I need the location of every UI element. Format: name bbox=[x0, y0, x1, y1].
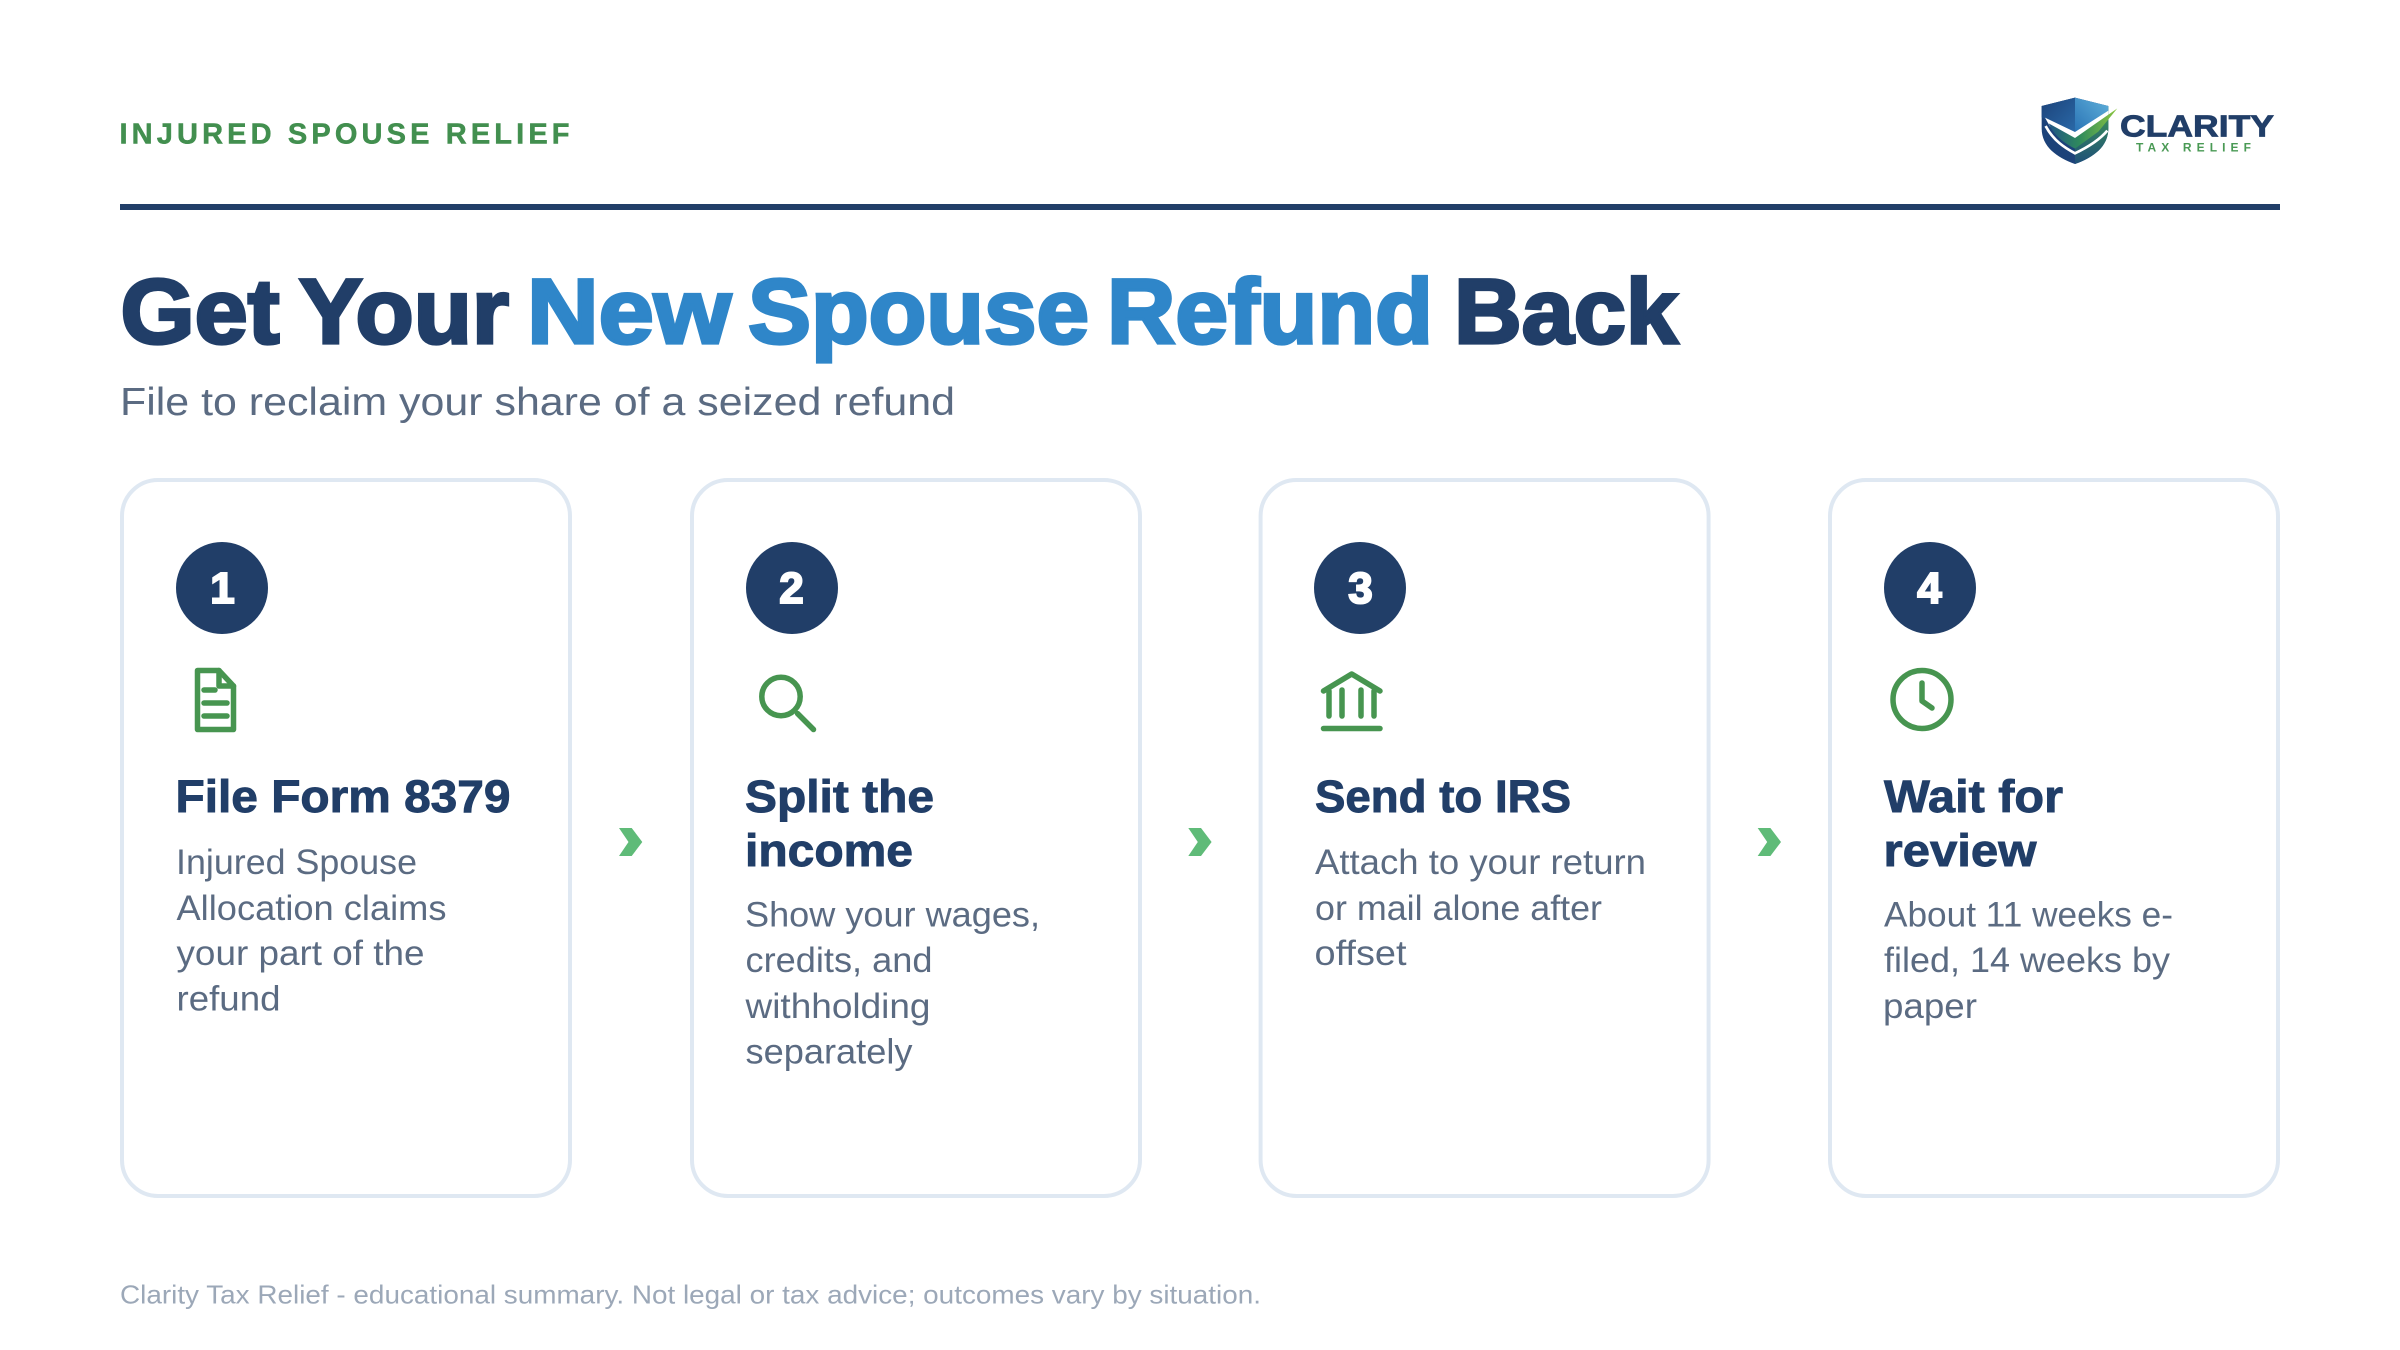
step 4 heading bbox=[1884, 771, 2063, 876]
step 2 heading: Split the bbox=[745, 771, 934, 822]
step 3 description bbox=[1314, 843, 1646, 973]
step 2 description: Show your wages, bbox=[745, 896, 1040, 934]
logo tagline: TAX RELIEF bbox=[2136, 140, 2251, 154]
title: Spouse bbox=[748, 261, 1089, 363]
panel: step 2 bbox=[692, 480, 1140, 1196]
logo wordmark: CLARITY bbox=[2120, 108, 2274, 144]
step 4 heading: Wait for bbox=[1884, 771, 2063, 822]
icon: clock bbox=[1893, 670, 1951, 728]
arrow 1 bbox=[619, 828, 642, 856]
step 2 heading: income bbox=[745, 825, 913, 876]
step 1 description: your part of the bbox=[176, 934, 424, 973]
arrow 3 bbox=[1758, 828, 1781, 856]
title: Your bbox=[299, 261, 509, 363]
step 3 description: Attach to your return bbox=[1315, 843, 1646, 882]
icon: shield with checkmark bbox=[2042, 98, 2117, 164]
header rule bbox=[120, 204, 2280, 210]
step 2 description: separately bbox=[746, 1032, 913, 1072]
title: Get bbox=[120, 261, 280, 363]
step 4 description: paper bbox=[1883, 987, 1977, 1026]
subtitle: File to reclaim your share of a seized refund bbox=[120, 381, 955, 424]
step 2 description: withholding bbox=[744, 987, 930, 1026]
icon: bank bbox=[1324, 674, 1380, 728]
step 4 heading: review bbox=[1884, 825, 2038, 876]
panel: step 4 bbox=[1830, 480, 2278, 1196]
step 3 description: offset bbox=[1314, 934, 1407, 973]
step 3 heading: Send to IRS bbox=[1315, 771, 1571, 822]
step 2 heading bbox=[745, 771, 934, 876]
title: Refund bbox=[1107, 261, 1433, 363]
step number 4: 4 bbox=[1917, 564, 1942, 613]
step number 3: 3 bbox=[1348, 564, 1373, 613]
panel: step 3 bbox=[1261, 480, 1709, 1196]
step number 1 bbox=[176, 542, 268, 634]
step 3 description: or mail alone after bbox=[1315, 889, 1602, 928]
step 1 description: refund bbox=[176, 980, 280, 1018]
step 1 description: Injured Spouse bbox=[176, 843, 417, 882]
title: Back bbox=[1454, 261, 1679, 363]
icon: magnifier bbox=[762, 677, 814, 730]
step number 2: 2 bbox=[779, 564, 804, 613]
arrow 2 bbox=[1188, 828, 1212, 856]
icon: document bbox=[198, 670, 234, 730]
panel: step 1 bbox=[122, 480, 570, 1196]
title bbox=[120, 261, 1679, 363]
eyebrow label: INJURED SPOUSE RELIEF bbox=[120, 118, 570, 150]
step 2 description: credits, and bbox=[746, 941, 932, 980]
step 2 description bbox=[744, 896, 1040, 1072]
title: New bbox=[527, 261, 731, 363]
footer disclaimer: Clarity Tax Relief - educational summary. Not legal or tax advice; outcomes vary by situation. bbox=[120, 1280, 1261, 1310]
step number 3 bbox=[1314, 542, 1406, 634]
step number 1: 1 bbox=[210, 564, 235, 613]
step number 2 bbox=[746, 542, 838, 634]
step 1 description: Allocation claims bbox=[176, 889, 446, 928]
step 1 heading: File Form 8379 bbox=[176, 771, 510, 822]
step 1 description bbox=[176, 843, 446, 1018]
step number 4 bbox=[1884, 542, 1976, 634]
step 4 description bbox=[1883, 896, 2173, 1026]
step 4 description: About 11 weeks e- bbox=[1884, 896, 2173, 934]
step 4 description: filed, 14 weeks by bbox=[1884, 941, 2171, 980]
logo: Clarity Tax Relief bbox=[2042, 98, 2274, 164]
